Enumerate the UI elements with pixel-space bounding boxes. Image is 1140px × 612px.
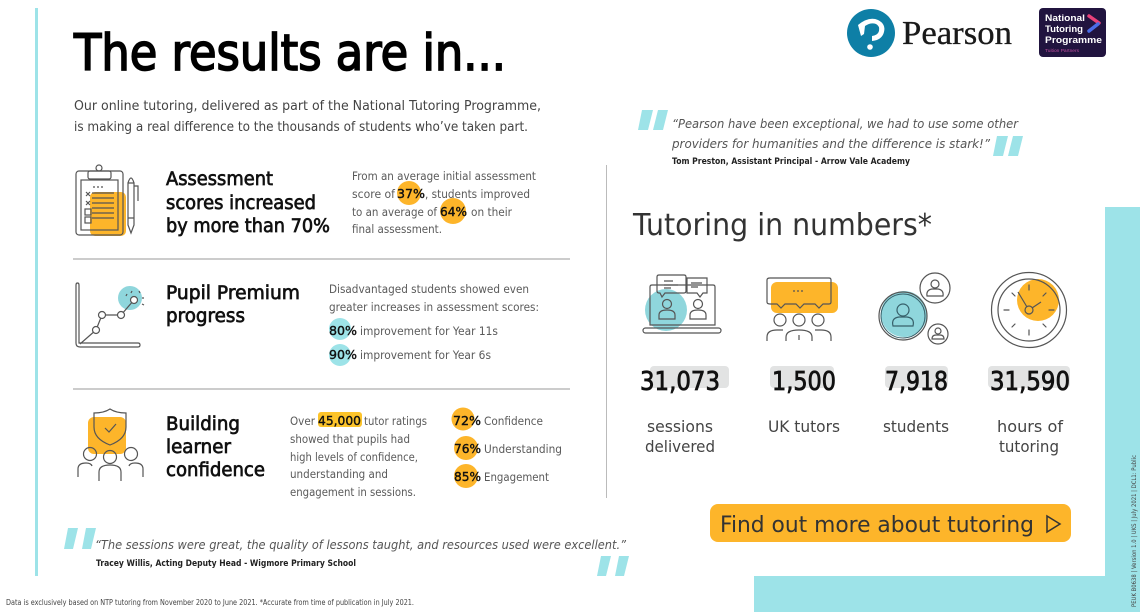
text: assessment detail: score of — [352, 188, 396, 201]
logo: Pearson: Pearson — [902, 15, 1012, 52]
number — [650, 366, 729, 388]
stat: students: 7,918 — [885, 367, 948, 397]
icon: clipboard and pen — [76, 165, 138, 236]
logo: National Tutoring Programme: Tuition Partners — [1045, 48, 1080, 53]
text: pupil premium detail: Disadvantaged students showed even — [329, 283, 529, 296]
vertical document reference: PEUK B0638 | Version 1.0 | UKS | July 2021 | DCL1: Public — [1130, 455, 1138, 607]
text: assessment detail: 37% — [397, 186, 425, 201]
vertical divider — [606, 165, 607, 498]
heading: assessment: by more than 70% — [166, 216, 330, 237]
intro text: is making a real difference to the thousands of students who’ve taken part. — [74, 120, 528, 135]
text: assessment detail — [352, 170, 537, 236]
heading: building confidence — [166, 414, 265, 481]
text: ratings detail: Confidence — [484, 415, 543, 428]
logo: National Tutoring Programme: Programme — [1045, 35, 1102, 46]
heading: pupil premium: progress — [166, 306, 245, 327]
icon: tutors with speech bubble — [767, 278, 838, 341]
number — [988, 366, 1070, 388]
heading: pupil premium: Pupil Premium — [166, 283, 300, 304]
icon: laptop with chat — [643, 275, 721, 333]
quote: Tom Preston: providers for humanities and the difference is stark!” — [671, 136, 990, 151]
panel: assessment scores — [76, 165, 537, 237]
quote: Tom Preston — [638, 110, 1023, 167]
label — [645, 417, 715, 456]
title: The results are in... — [73, 24, 506, 82]
label: delivered — [645, 437, 715, 456]
text: assessment detail: final assessment. — [352, 223, 442, 236]
heading: building confidence: learner — [166, 437, 231, 458]
icon: shield and learners — [78, 409, 143, 481]
panel: pupil premium — [76, 283, 539, 366]
text: ratings detail: 72% — [453, 413, 481, 428]
label: tutoring — [999, 437, 1059, 456]
intro text: Our online tutoring, delivered as part of the National Tutoring Programme, — [74, 99, 541, 114]
text: ratings detail: Engagement — [484, 471, 550, 484]
intro text — [74, 99, 541, 135]
icon: clock — [992, 272, 1066, 348]
text: pupil premium detail: improvement for Year 6s — [360, 349, 491, 362]
text: pupil premium detail: 80% — [329, 323, 357, 338]
number — [770, 366, 834, 388]
logo: National Tutoring Programme: National — [1045, 13, 1085, 24]
label: students — [883, 417, 949, 436]
label: UK tutors — [768, 417, 840, 436]
text: pupil premium detail: greater increases in assessment scores: — [329, 301, 539, 314]
quote: Tom Preston: Tom Preston, Assistant Principal - Arrow Vale Academy — [672, 157, 910, 167]
text: ratings detail: 45,000 — [318, 413, 361, 428]
label: sessions — [647, 417, 713, 436]
stat: UK tutors — [767, 278, 840, 436]
button: find out more — [710, 504, 1071, 542]
text: assessment detail: to an average of — [352, 206, 438, 219]
heading: assessment: scores increased — [166, 193, 316, 214]
right accent panel — [754, 207, 1140, 612]
heading: building confidence: Building — [166, 414, 240, 435]
stat: sessions delivered — [640, 275, 729, 456]
text: ratings detail: 76% — [454, 441, 481, 456]
highlight circles — [397, 181, 466, 224]
heading: tutoring in numbers: Tutoring in numbers* — [632, 208, 932, 243]
text: ratings detail: understanding and — [290, 468, 388, 481]
quote: Tom Preston: “Pearson have been exceptional, we had to use some other — [672, 116, 1019, 131]
text: pupil premium detail — [329, 283, 539, 362]
highlights — [318, 408, 478, 488]
stat: sessions delivered: 31,073 — [640, 367, 720, 397]
footnote: Data is exclusively based on NTP tutoring from November 2020 to June 2021. *Accurate from time of publication in July 2021. — [6, 598, 414, 607]
quote: Tracey Willis: Tracey Willis, Acting Deputy Head - Wigmore Primary School — [96, 559, 356, 569]
logo: Pearson — [847, 9, 1012, 57]
text: ratings detail: engagement in sessions. — [290, 486, 416, 499]
quote: Tracey Willis — [64, 528, 629, 576]
icon: connected students — [879, 273, 950, 344]
text: assessment detail: , students improved — [425, 188, 530, 201]
icon: progress chart — [76, 283, 144, 347]
text: assessment detail: 64% — [440, 204, 467, 219]
logo: National Tutoring Programme — [1039, 8, 1106, 57]
text: pupil premium detail: improvement for Year 11s — [360, 325, 498, 338]
quote: Tracey Willis: “The sessions were great, the quality of lessons taught, and resources used were excellent.” — [95, 538, 626, 553]
text: ratings detail: 85% — [454, 469, 481, 484]
stat: students — [879, 273, 950, 436]
heading: assessment: Assessment — [166, 169, 273, 190]
text: ratings detail: high levels of confidence, — [290, 451, 418, 464]
text: ratings detail: Over — [290, 415, 315, 428]
highlight circles — [329, 318, 351, 366]
number — [885, 366, 948, 388]
icon: play arrow — [1047, 516, 1060, 532]
label — [997, 417, 1063, 456]
stat: hours of tutoring: 31,590 — [990, 367, 1070, 397]
text: pupil premium detail: 90% — [329, 347, 357, 362]
heading: building confidence: confidence — [166, 460, 265, 481]
text: assessment detail: From an average initial assessment — [352, 170, 537, 183]
stat: hours of tutoring — [988, 272, 1070, 456]
text: ratings detail: Understanding — [484, 443, 562, 456]
text: ratings detail — [290, 413, 562, 499]
heading: pupil premium — [166, 283, 300, 327]
button: find out more: Find out more about tutoring — [720, 512, 1034, 538]
panel: learner confidence — [78, 408, 562, 499]
left accent bar — [35, 8, 38, 576]
label: hours of — [997, 417, 1063, 436]
text: ratings detail: showed that pupils had — [290, 433, 410, 446]
logo: National Tutoring Programme: Tutoring — [1045, 24, 1083, 35]
text: assessment detail: on their — [471, 206, 512, 219]
heading: assessment — [166, 169, 330, 237]
stat: UK tutors: 1,500 — [772, 367, 836, 397]
text: ratings detail: tutor ratings — [364, 415, 427, 428]
